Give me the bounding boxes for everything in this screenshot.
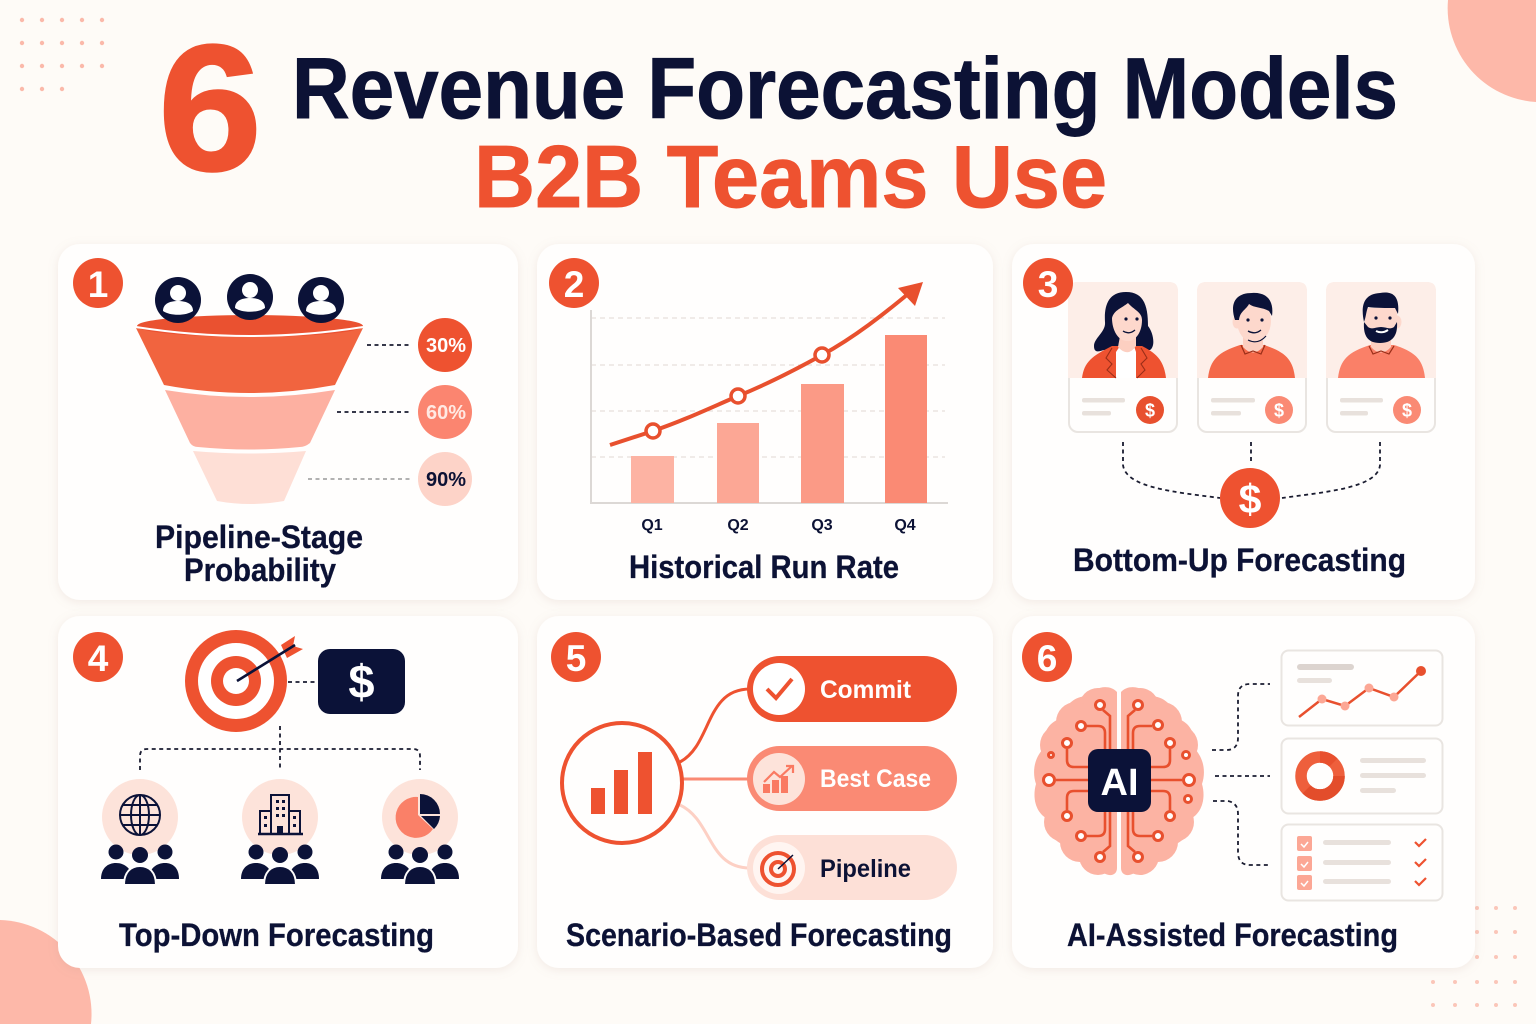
AI chip: AI bbox=[1100, 762, 1138, 804]
target icon bbox=[185, 630, 303, 732]
bar chart bbox=[591, 310, 948, 503]
badge 3 bbox=[1023, 258, 1073, 308]
connectors to total bbox=[1123, 442, 1380, 498]
globe segment bbox=[101, 779, 179, 885]
probability 60%: 60% bbox=[426, 402, 466, 424]
badge 2 bbox=[549, 258, 599, 308]
probability connectors bbox=[308, 345, 410, 479]
branch connectors bbox=[680, 689, 750, 868]
big number 6: 6 bbox=[158, 8, 262, 209]
badge 3: 3 bbox=[1038, 264, 1058, 305]
panel: ai-assisted forecasting bbox=[1012, 616, 1475, 968]
pill: pipeline bbox=[747, 835, 957, 900]
title line 1: Revenue Forecasting Models bbox=[292, 41, 1398, 137]
checklist card bbox=[1282, 824, 1442, 900]
rep card 3 bbox=[1326, 282, 1436, 432]
rep card 1 bbox=[1068, 282, 1178, 432]
trend arrow bbox=[610, 282, 923, 445]
pill: best case bbox=[747, 746, 957, 811]
badge 5 bbox=[551, 632, 601, 682]
badge 6: 6 bbox=[1037, 638, 1057, 679]
badge 4: 4 bbox=[88, 638, 109, 679]
total dollar circle: $ bbox=[1239, 476, 1262, 522]
panel: scenario-based forecasting bbox=[537, 616, 993, 968]
quarter labels bbox=[641, 517, 916, 534]
probability 30%: 30% bbox=[426, 335, 466, 357]
badge 4 bbox=[73, 632, 123, 682]
probability 30% bbox=[418, 318, 472, 372]
badge 6 bbox=[1022, 632, 1072, 682]
heading: Pipeline-Stage bbox=[155, 519, 363, 555]
rep card 1: $ bbox=[1145, 400, 1155, 420]
donut card bbox=[1282, 738, 1442, 814]
decorative circle bottom left bbox=[0, 920, 92, 1024]
quarter labels: Q3 bbox=[811, 517, 833, 534]
connectors bbox=[1212, 684, 1270, 865]
heading bbox=[155, 519, 363, 588]
tree connectors bbox=[140, 682, 420, 770]
heading: Top-Down Forecasting bbox=[119, 917, 434, 953]
dollar box: $ bbox=[348, 655, 375, 708]
pill: best case: Best Case bbox=[820, 765, 931, 793]
dollar box bbox=[318, 649, 405, 714]
title line 2: B2B Teams Use bbox=[474, 127, 1107, 226]
panel: bottom-up forecasting bbox=[1012, 244, 1475, 600]
pill: commit bbox=[747, 656, 957, 722]
pill: commit: Commit bbox=[820, 676, 912, 704]
probability 60% bbox=[418, 385, 472, 439]
AI chip bbox=[1088, 749, 1151, 812]
heading: Probability bbox=[184, 552, 336, 588]
total dollar circle bbox=[1220, 468, 1280, 528]
pill: pipeline: Pipeline bbox=[820, 855, 911, 883]
funnel bbox=[136, 315, 363, 504]
panel: historical run rate bbox=[537, 244, 993, 600]
decorative circle top right bbox=[1448, 0, 1536, 102]
dots bottom right bbox=[1431, 906, 1517, 1007]
quarter labels: Q2 bbox=[727, 517, 749, 534]
heading: Historical Run Rate bbox=[629, 549, 899, 585]
badge 5: 5 bbox=[566, 638, 586, 679]
probability 90% bbox=[418, 452, 472, 506]
probability 90%: 90% bbox=[426, 469, 466, 491]
heading: Scenario-Based Forecasting bbox=[566, 917, 952, 953]
quarter labels: Q1 bbox=[641, 517, 663, 534]
brain with circuits bbox=[1034, 687, 1204, 875]
heading: AI-Assisted Forecasting bbox=[1067, 917, 1398, 953]
rep card 3: $ bbox=[1402, 400, 1412, 420]
panel: top-down forecasting bbox=[58, 616, 518, 968]
panel: pipeline-stage probability bbox=[58, 244, 518, 600]
prospect icons bbox=[155, 274, 344, 323]
building segment bbox=[241, 779, 319, 885]
rep card 2: $ bbox=[1274, 400, 1284, 420]
pie segment bbox=[381, 779, 459, 885]
rep card 2 bbox=[1197, 282, 1307, 432]
heading: Bottom-Up Forecasting bbox=[1073, 542, 1406, 578]
badge 2: 2 bbox=[564, 264, 584, 305]
badge 1: 1 bbox=[88, 264, 108, 305]
badge 1 bbox=[73, 258, 123, 308]
title bbox=[158, 8, 1398, 226]
bar chart circle bbox=[562, 723, 682, 843]
quarter labels: Q4 bbox=[894, 517, 916, 534]
dots top left bbox=[20, 18, 104, 91]
line chart card bbox=[1282, 650, 1442, 726]
